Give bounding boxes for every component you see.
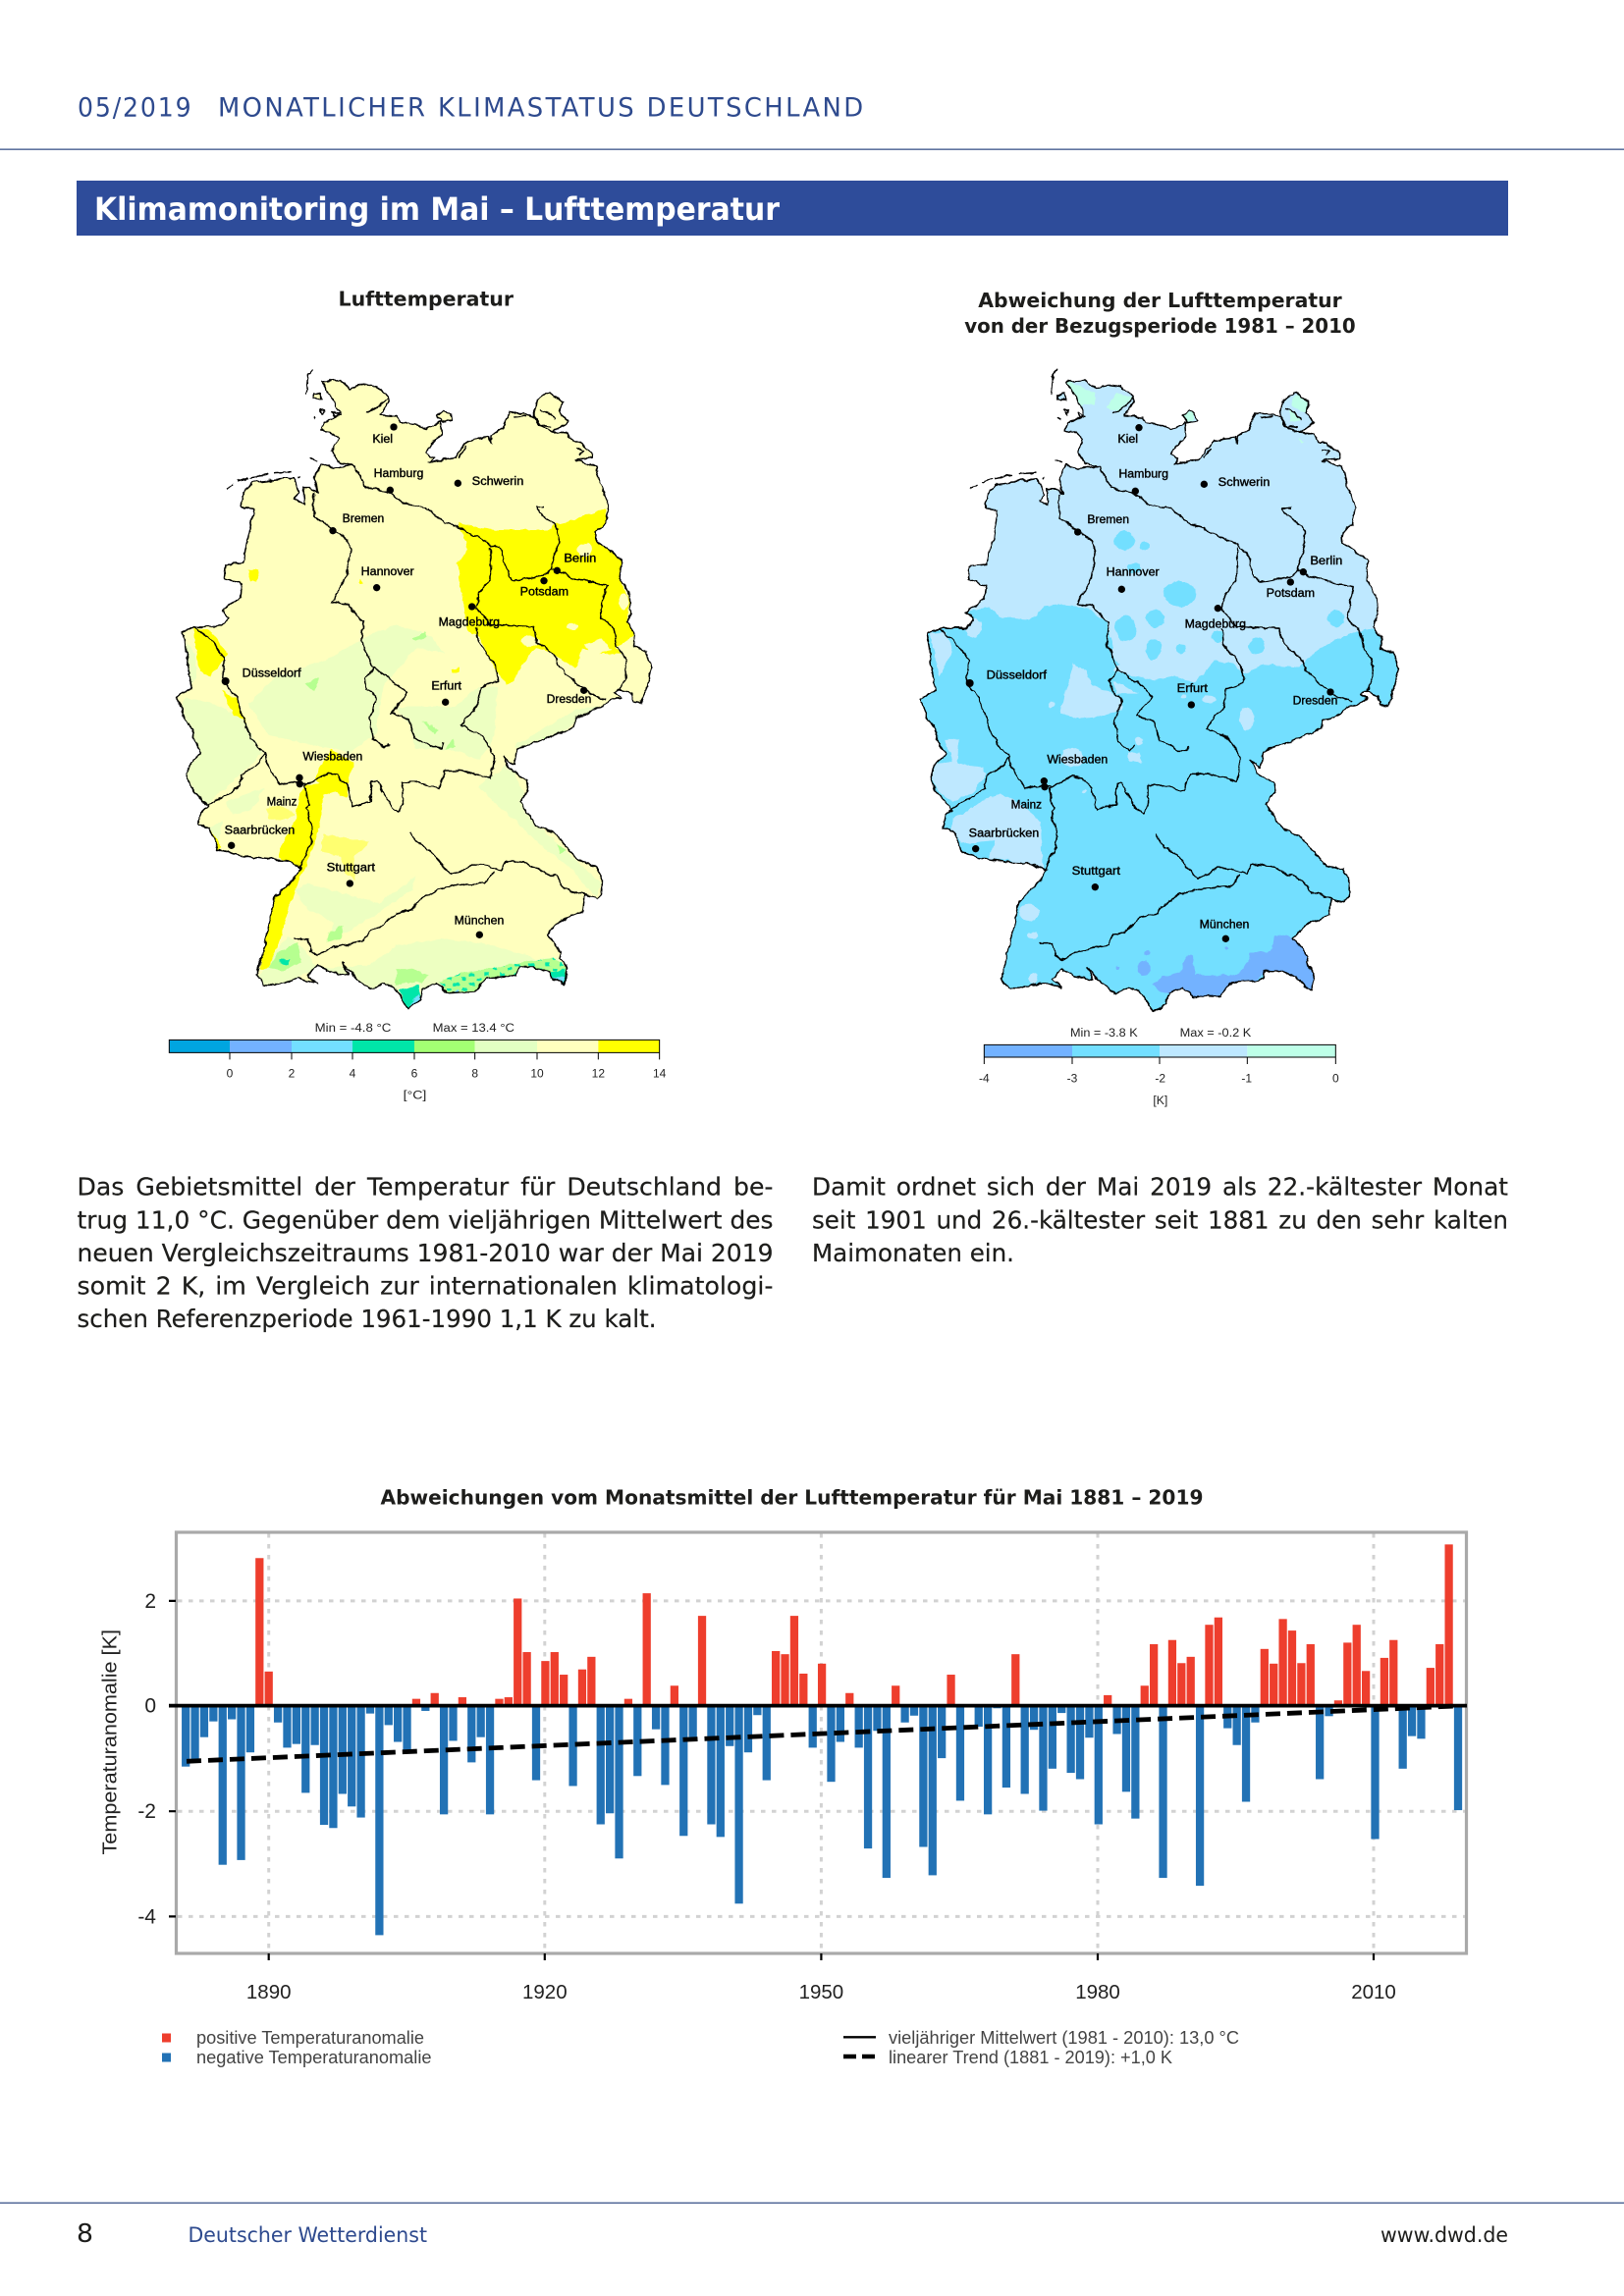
section title banner: Klimamonitoring im Mai – Lufttemperatur: [94, 190, 780, 228]
city labels: Düsseldorf: [987, 668, 1048, 682]
legend: temperature colour scale: [169, 1021, 667, 1101]
city labels: Stuttgart: [327, 861, 376, 875]
city labels: [225, 432, 596, 928]
x axis labels: 1980: [1075, 1981, 1120, 2003]
city labels: Saarbrücken: [969, 827, 1039, 840]
city dots: [222, 423, 587, 938]
heading: right map: von der Bezugsperiode 1981 – 2010: [964, 314, 1356, 338]
y axis labels: -2: [137, 1800, 156, 1823]
city labels: Bremen: [343, 511, 384, 525]
legend: temperature colour scale: 6: [411, 1066, 418, 1080]
chart legend: bars: [162, 2027, 432, 2067]
section title banner: [77, 181, 1508, 236]
legend: anomaly colour scale: [979, 1026, 1339, 1107]
city labels: Erfurt: [1177, 681, 1209, 695]
legend: temperature colour scale: 8: [471, 1066, 478, 1080]
legend: anomaly colour scale: 0: [1332, 1071, 1339, 1085]
bar chart: temperature anomalies 1881-2019: [169, 1532, 1467, 1960]
city labels: Hamburg: [1118, 467, 1168, 481]
legend: temperature colour scale: Max = 13.4 °C: [433, 1021, 514, 1035]
heading: right map: [964, 289, 1356, 338]
city labels: Dresden: [547, 692, 591, 706]
city labels: Hamburg: [374, 466, 423, 480]
frame: [177, 1532, 1467, 1953]
legend: temperature colour scale: 0: [227, 1066, 234, 1080]
negative anomaly bars: [182, 1706, 1462, 1935]
map outline and state borders: [921, 369, 1398, 1012]
text block: right column: Maimonaten ein.: [812, 1239, 1014, 1267]
chart heading: Abweichungen vom Monatsmittel der Lufttemperatur für Mai 1881 – 2019: [381, 1486, 1204, 1510]
y axis labels: [137, 1590, 156, 1928]
map outline and state borders: [177, 369, 651, 1008]
linear trend line: [187, 1706, 1455, 1761]
map fill: temperature classes: [167, 363, 665, 1018]
city labels: Düsseldorf: [243, 666, 301, 679]
city labels: Kiel: [372, 432, 393, 446]
city labels: Kiel: [1117, 432, 1138, 446]
header rule: [0, 149, 1624, 150]
city labels: Mainz: [1011, 798, 1042, 812]
panel: temperature anomaly map of Germany: [903, 363, 1407, 1107]
x axis labels: 1890: [246, 1981, 292, 2003]
running header: MONATLICHER KLIMASTATUS DEUTSCHLAND: [218, 92, 866, 124]
city labels: Berlin: [1310, 554, 1342, 567]
text block: left column: neuen Vergleichszeitraums 1981-2010 war der Mai 2019: [77, 1239, 774, 1267]
y axis labels: 0: [144, 1695, 156, 1718]
city labels: Schwerin: [472, 474, 523, 488]
axis ticks: [169, 1601, 1374, 1960]
city dots: [966, 424, 1334, 942]
legend: anomaly colour scale: [K]: [1153, 1094, 1167, 1107]
footer rule: [0, 2203, 1624, 2204]
city labels: [969, 432, 1342, 931]
footer: publisher: Deutscher Wetterdienst: [189, 2223, 427, 2248]
text block: right column: Damit ordnet sich der Mai 2019 als 22.-kältester Monat: [812, 1173, 1508, 1201]
city labels: Hannover: [1107, 565, 1160, 579]
city labels: München: [1200, 917, 1249, 931]
city labels: Hannover: [361, 564, 414, 578]
city labels: Potsdam: [1267, 586, 1315, 600]
city labels: Bremen: [1087, 512, 1129, 526]
chart legend: bars: positive Temperaturanomalie: [196, 2027, 424, 2048]
legend: temperature colour scale: 4: [350, 1066, 356, 1080]
city labels: Magdeburg: [1185, 617, 1246, 631]
legend: anomaly colour scale: -4: [979, 1071, 990, 1085]
x axis labels: [246, 1981, 1396, 2003]
legend: anomaly colour scale: Max = -0.2 K: [1180, 1026, 1251, 1040]
running header: 05/2019: [78, 92, 192, 124]
map surface: [903, 363, 1407, 1024]
chart legend: bars: negative Temperaturanomalie: [196, 2047, 432, 2067]
map fill: anomaly classes: [903, 363, 1407, 1024]
city labels: München: [455, 914, 504, 928]
heading: right map: Abweichung der Lufttemperatur: [978, 289, 1343, 312]
text block: right column: [812, 1173, 1508, 1267]
page number: 8: [77, 2219, 93, 2249]
heading: left map: Lufttemperatur: [338, 287, 514, 310]
y axis labels: 2: [144, 1590, 156, 1613]
text block: left column: Das Gebietsmittel der Temperatur für Deutschland be-: [77, 1173, 774, 1201]
map surface: [167, 363, 665, 1018]
long-term mean line: [169, 1704, 1467, 1707]
text block: left column: trug 11,0 °C. Gegenüber dem vieljährigen Mittelwert des: [77, 1205, 774, 1234]
city labels: Potsdam: [520, 585, 568, 599]
chart legend: lines: [843, 2027, 1239, 2067]
x axis labels: 2010: [1351, 1981, 1396, 2003]
legend: anomaly colour scale: Min = -3.8 K: [1070, 1026, 1138, 1040]
y axis title: Temperaturanomalie [K]: [98, 1629, 122, 1855]
city labels: Magdeburg: [439, 614, 500, 628]
city labels: Erfurt: [431, 679, 462, 693]
legend: temperature colour scale: 12: [592, 1066, 605, 1080]
x axis labels: 1950: [799, 1981, 843, 2003]
positive anomaly bars: [255, 1544, 1453, 1706]
legend: anomaly colour scale: -2: [1155, 1071, 1165, 1085]
city labels: Stuttgart: [1072, 864, 1121, 878]
city labels: Saarbrücken: [225, 824, 295, 837]
legend: anomaly colour scale: -3: [1067, 1071, 1078, 1085]
legend: anomaly colour scale: -1: [1241, 1071, 1252, 1085]
x axis labels: 1920: [522, 1981, 568, 2003]
legend: temperature colour scale: 2: [289, 1066, 296, 1080]
footer: website: www.dwd.de: [1380, 2223, 1508, 2248]
city labels: Wiesbaden: [1047, 752, 1108, 766]
city labels: Mainz: [267, 795, 297, 809]
chart legend: lines: vieljähriger Mittelwert (1981 - 2010): 13,0 °C: [889, 2027, 1239, 2048]
chart legend: lines: linearer Trend (1881 - 2019): +1,0 K: [889, 2047, 1173, 2067]
legend: temperature colour scale: 10: [530, 1066, 544, 1080]
city labels: Berlin: [564, 552, 596, 565]
panel: temperature map of Germany: [167, 363, 667, 1101]
text block: left column: [77, 1173, 774, 1333]
city labels: Schwerin: [1218, 475, 1270, 489]
legend: temperature colour scale: [°C]: [404, 1088, 426, 1101]
text block: left column: schen Referenzperiode 1961-1990 1,1 K zu kalt.: [77, 1305, 656, 1333]
y axis labels: -4: [137, 1906, 156, 1928]
text block: right column: seit 1901 und 26.-kältester seit 1881 zu den sehr kalten: [812, 1205, 1508, 1234]
text block: left column: somit 2 K, im Vergleich zur internationalen klimatologi-: [77, 1271, 773, 1300]
city labels: Dresden: [1293, 694, 1337, 708]
legend: temperature colour scale: Min = -4.8 °C: [315, 1021, 392, 1035]
city labels: Wiesbaden: [302, 749, 362, 763]
legend: temperature colour scale: 14: [653, 1066, 667, 1080]
